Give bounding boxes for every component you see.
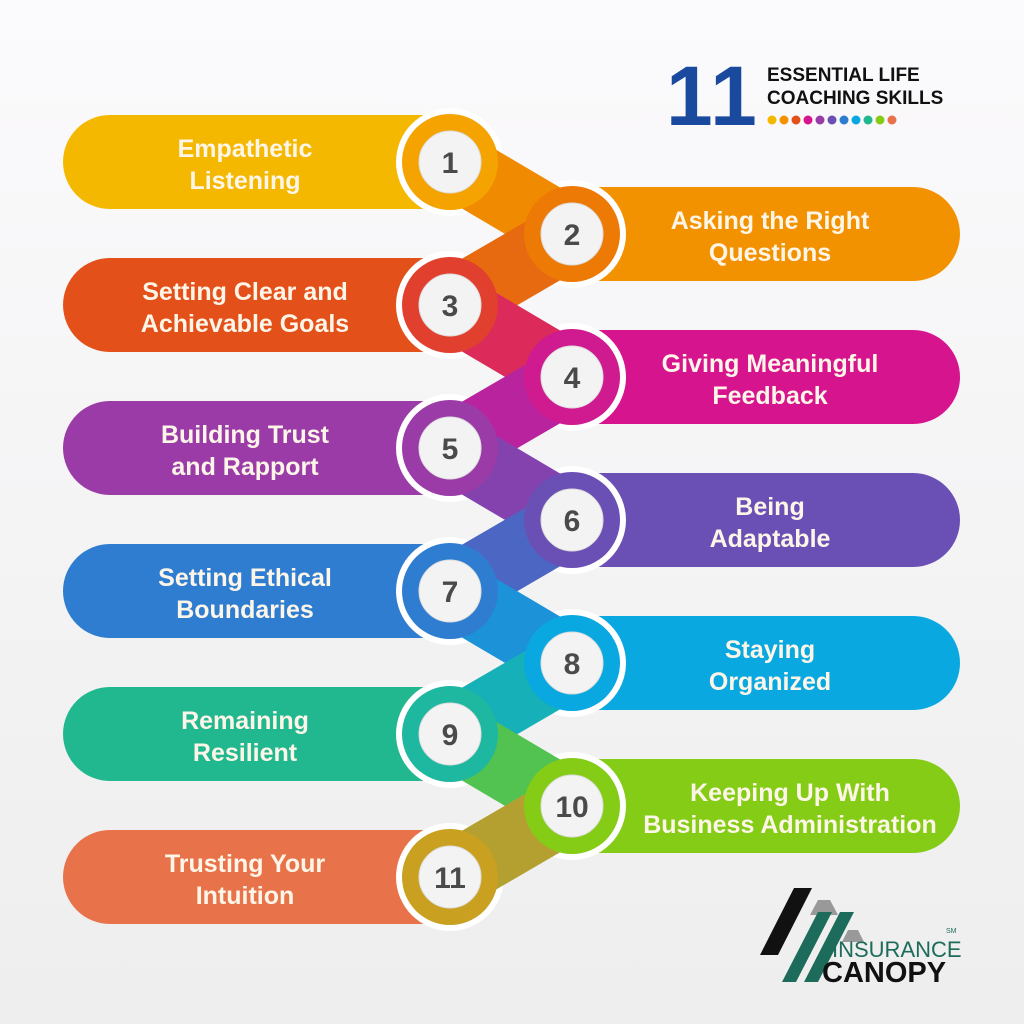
pill 10: Business Administration xyxy=(643,811,937,839)
node chain: 3 xyxy=(442,290,458,323)
pill 6 xyxy=(572,473,960,567)
node chain: 2 xyxy=(564,219,580,252)
pill 11 xyxy=(63,830,450,924)
pill 6: Adaptable xyxy=(710,525,831,553)
pill 10: Keeping Up With xyxy=(690,779,890,807)
pill 7: Setting Ethical xyxy=(158,564,332,592)
logo: INSURANCE xyxy=(832,937,962,962)
pill 3: Setting Clear and xyxy=(142,278,348,306)
pill 2 xyxy=(572,187,960,281)
pill 1 xyxy=(63,115,450,209)
logo: SM xyxy=(946,928,957,935)
pill 7: Boundaries xyxy=(176,596,314,624)
title: ESSENTIAL LIFE xyxy=(767,65,920,86)
title: 11 xyxy=(666,49,759,143)
pill 5 xyxy=(63,401,450,495)
node chain xyxy=(396,108,626,931)
node chain: 9 xyxy=(442,719,458,752)
pill 4: Feedback xyxy=(712,382,828,410)
logo xyxy=(760,888,962,989)
pill 9 xyxy=(63,687,450,781)
pill 10 xyxy=(572,759,960,853)
logo: CANOPY xyxy=(822,957,946,989)
pill 8 xyxy=(572,616,960,710)
pill 11: Trusting Your xyxy=(165,850,325,878)
title: COACHING SKILLS xyxy=(767,88,943,109)
pills xyxy=(63,115,960,924)
pill 4 xyxy=(572,330,960,424)
pill 4: Giving Meaningful xyxy=(662,350,878,378)
node chain: 7 xyxy=(442,576,458,609)
node chain: 1 xyxy=(442,147,458,180)
pill 3 xyxy=(63,258,450,352)
pill 2: Questions xyxy=(709,239,831,267)
node chain: 8 xyxy=(564,648,580,681)
pill 9: Resilient xyxy=(193,739,298,767)
pill 7 xyxy=(63,544,450,638)
node chain: 5 xyxy=(442,433,458,466)
node chain: 6 xyxy=(564,505,580,538)
pill 3: Achievable Goals xyxy=(141,310,349,338)
pill 9: Remaining xyxy=(181,707,309,735)
pill 8: Organized xyxy=(709,668,831,696)
pill 6: Being xyxy=(735,493,805,521)
pill 11: Intuition xyxy=(196,882,294,910)
node chain: 10 xyxy=(555,791,589,824)
pill 1: Listening xyxy=(189,167,301,195)
node chain: 4 xyxy=(564,362,581,395)
pill 8: Staying xyxy=(725,636,815,664)
title xyxy=(666,49,943,143)
node chain: 11 xyxy=(434,862,466,895)
pill 5: and Rapport xyxy=(171,453,319,481)
pill 5: Building Trust xyxy=(161,421,330,449)
pill 1: Empathetic xyxy=(178,135,312,163)
pill 2: Asking the Right xyxy=(671,207,870,235)
